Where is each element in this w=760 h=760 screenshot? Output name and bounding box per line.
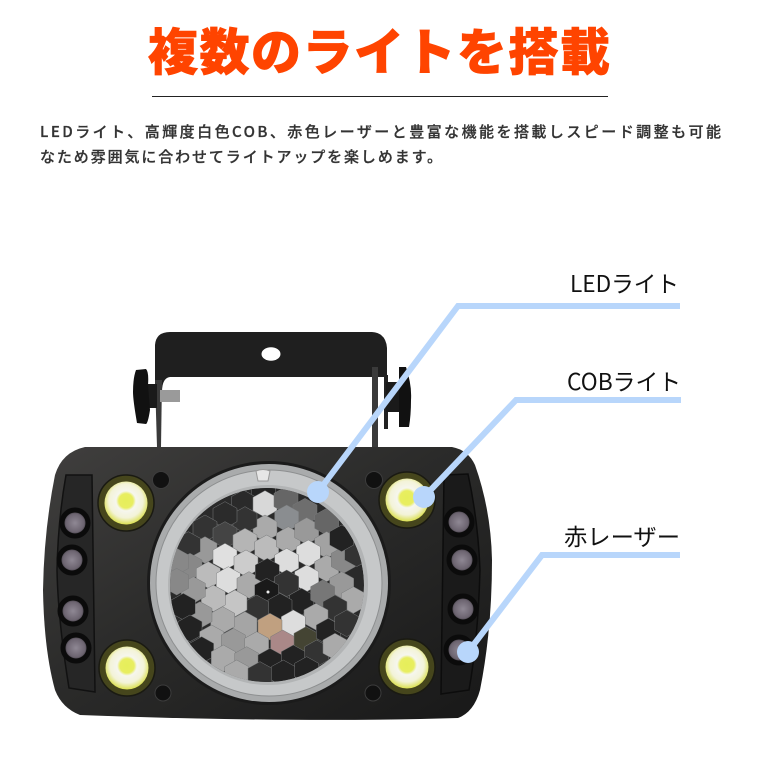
dome ring: [147, 461, 391, 705]
COB lights: [98, 472, 435, 696]
callout: LED light: [307, 265, 680, 503]
callout: red laser: [457, 518, 680, 663]
right side panel: [441, 474, 480, 694]
title: 複数のライトを搭載: [148, 13, 610, 85]
product: stage light: [43, 332, 492, 720]
screws: [152, 472, 382, 701]
description text: LEDライト、高輝度白色COB、赤色レーザーと豊富な機能を搭載しスピード調整も可能: [40, 121, 721, 142]
light body: [43, 447, 492, 720]
callout: COB light: COBライト: [567, 363, 681, 397]
left knob: [133, 369, 180, 424]
description text: [40, 121, 721, 167]
lenses: [59, 509, 476, 663]
mounting bracket: [155, 332, 388, 448]
right knob: [386, 367, 411, 427]
description text: なため雰囲気に合わせてライトアップを楽しめます。: [40, 146, 442, 167]
callout: red laser: 赤レーザー: [564, 518, 680, 552]
callout: LED light: LEDライト: [570, 265, 679, 299]
mirror ball: [170, 488, 364, 682]
title rule: [152, 96, 608, 97]
callout: COB light: [413, 363, 681, 508]
left side panel: [57, 475, 95, 692]
